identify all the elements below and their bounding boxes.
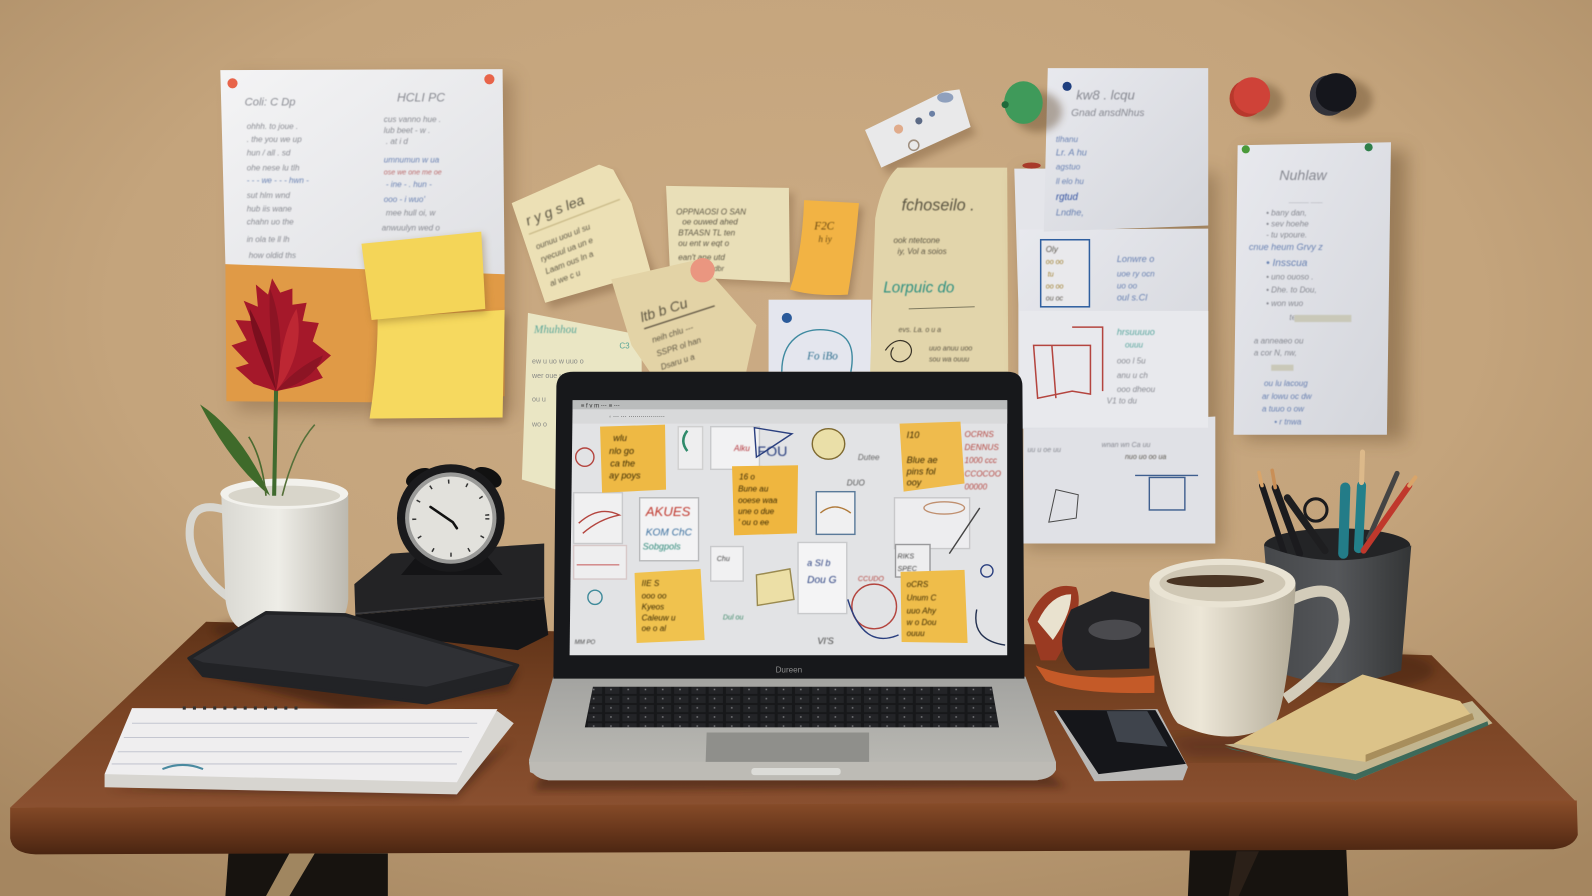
panel: right list sheet: ou lu lacoug [1264, 379, 1308, 388]
note: typed cream note: oe ouwed ahed [682, 218, 738, 227]
cream coffee mug [1149, 559, 1344, 757]
screen sticky notes: ooo oo [642, 591, 667, 600]
panel: right list sheet: • Insscua [1266, 258, 1308, 269]
panel: right list sheet: • uno ouoso . [1266, 272, 1314, 281]
sticky note: lower yellow [370, 310, 508, 424]
screen sticky notes: IIE S [642, 579, 660, 588]
laptop lid [553, 372, 1024, 679]
note: tilted cream note: ryecuul ua un e [539, 235, 595, 264]
middle sheet with blue and red diagrams: Oly [1046, 245, 1059, 254]
note: typed cream note: ean't ane utd [678, 253, 725, 262]
poster handwritten text: how oldid ths [249, 251, 296, 260]
note: torn beige note with pink pin [611, 258, 756, 373]
poster handwritten text: anwuulyn wed o [382, 224, 440, 233]
screen sticky notes: ca the [610, 458, 635, 468]
screen sticky notes: Blue ae [907, 455, 938, 465]
note: pale green-tinted note: ew u uo w uuo o [532, 358, 584, 366]
middle sheet with blue and red diagrams: V1 to du [1107, 396, 1137, 405]
poster handwritten text: hun / all . sd [247, 148, 291, 157]
black box under clock [354, 543, 548, 650]
poster handwritten text [245, 91, 445, 260]
screen labels: MM PO [575, 639, 596, 646]
white mug with flower [190, 278, 355, 642]
poster handwritten text: cus vanno hue . [384, 115, 441, 124]
middle sheet with blue and red diagrams: Lonwre o [1117, 254, 1154, 264]
mug body [221, 496, 348, 632]
screen sticky notes: pins fol [906, 466, 937, 476]
top blue handwriting sheet: Lndhe, [1056, 207, 1084, 217]
note: tall beige note: fchoseilo . [902, 196, 975, 214]
screen labels: DENNUS [965, 443, 999, 452]
screen sticky notes [600, 422, 968, 643]
middle sheet with blue and red diagrams: oul s.Cl [1117, 293, 1148, 303]
poster handwritten text: - - - we - - - hwn - [247, 176, 309, 185]
middle sheet with blue and red diagrams: oo oo [1046, 283, 1064, 291]
panel: layered white sheets [1014, 68, 1222, 549]
note: torn beige note with pink pin: SSPR ol han [655, 335, 703, 358]
screen labels: DUO [847, 479, 865, 488]
note: pale green-tinted note: ou u [532, 395, 546, 403]
mug body [1149, 584, 1296, 737]
laptop screen: ◦ ⋯ ⋯ ⋯⋯⋯⋯⋯⋯ [609, 414, 665, 421]
panel: right list sheet: • Dhe. to Dou, [1266, 286, 1317, 295]
screen sticky notes: ooy [907, 478, 923, 488]
note: torn scrap [865, 89, 977, 175]
note: torn beige note with pink pin: Dsaru u a [660, 352, 696, 372]
screen sticky notes: oe o al [642, 624, 666, 633]
note: tilted cream note: al we c u [549, 268, 582, 289]
lower sketch sheet: wnan wn Ca uu [1102, 441, 1151, 449]
screen sticky notes: ouuu [907, 629, 925, 638]
laptop base [529, 677, 1066, 790]
top blue handwriting sheet: kw8 . lcqu [1076, 88, 1136, 103]
top blue handwriting sheet [1044, 68, 1208, 232]
panel: right list sheet [1234, 142, 1407, 441]
poster white upper sheet [220, 69, 505, 274]
poster handwritten text: chahn uo the [247, 218, 294, 227]
screen sticky notes: ooese waa [738, 496, 778, 505]
panel: left poster [220, 69, 513, 417]
screen labels: 00000 [965, 483, 988, 492]
note: tall beige note: sou wa ouuu [929, 356, 969, 364]
laptop screen: ≡ f v m ⋯ ≡ ⋯ [581, 402, 620, 409]
lower sketch sheet: uu u oe uu [1027, 446, 1061, 454]
screen sticky notes: nlo go [609, 446, 634, 456]
note: tall beige note: Lorpuic do [883, 280, 954, 297]
middle sheet with blue and red diagrams: ooo l 5u [1117, 357, 1146, 366]
brand text: Dureen [776, 666, 802, 675]
notebook with beige cover [1224, 675, 1492, 780]
middle sheet with blue and red diagrams: tu [1048, 270, 1054, 278]
poster handwritten text: ose we one me oe [384, 169, 442, 177]
screen labels: KOM ChC [646, 527, 693, 538]
note: tall beige note: iy, Vol a soios [898, 247, 947, 256]
magnet: green [1002, 81, 1062, 132]
panel: right list sheet: teecu [1289, 313, 1310, 322]
screen sticky notes: uuo Ahy [907, 607, 937, 616]
lower sketch sheet [1023, 417, 1215, 543]
magnet: red [1230, 77, 1283, 120]
note: typed cream note: pttl hon ptr dbr [677, 265, 725, 273]
gadgets behind phone [1027, 586, 1154, 693]
screen sketches [574, 427, 1005, 645]
poster handwritten text: HCLI PC [397, 91, 445, 105]
note: pale green-tinted note: C3 [619, 341, 630, 350]
note: pale green-tinted note: Mhuhhou [533, 324, 577, 336]
desk front edge [10, 801, 1578, 854]
screen labels: RIKS [898, 553, 914, 561]
phone [1054, 709, 1188, 781]
panel: right list sheet: a tuuo o ow [1262, 404, 1305, 413]
poster handwritten text: lub beet - w . [384, 126, 430, 135]
poster handwritten text: Coli: C Dp [245, 97, 296, 109]
small red clip [1022, 163, 1041, 169]
pencils [1259, 452, 1415, 554]
screen labels: CCOCOO [965, 469, 1002, 478]
poster handwritten text: ohe nese lu tlh [247, 164, 300, 173]
top blue handwriting sheet: Lr. A hu [1056, 147, 1087, 157]
note: pale green-tinted note: wo o [531, 421, 547, 429]
red flower [231, 278, 331, 391]
note: tilted cream note [512, 165, 658, 309]
desk legs [225, 849, 1348, 896]
panel: right list sheet: cnue heum Grvy z [1249, 242, 1323, 252]
screen labels: Alku [733, 444, 750, 453]
screen labels: VI'S [817, 636, 834, 646]
panel: right list sheet: a anneaeo ou [1254, 336, 1304, 345]
note: typed cream note: OPPNAOSI O SAN [676, 207, 746, 216]
screen labels: FOU [757, 444, 787, 460]
top blue handwriting sheet: tlhanu [1056, 135, 1078, 144]
cup interior [1264, 528, 1410, 563]
screen sticky notes: Kyeos [642, 603, 664, 612]
top blue handwriting sheet: agstuo [1056, 163, 1081, 172]
poster handwritten text: - ine - . hun - [386, 180, 432, 189]
panel: right list sheet: _____ ___ [1288, 196, 1323, 204]
poster handwritten text: umnumun w ua [384, 156, 440, 165]
laptop [529, 372, 1066, 790]
note: white sketch sheet with blue dot [769, 300, 871, 372]
note: tilted cream note: r y g s lea [524, 193, 587, 230]
screen sticky notes: ay poys [609, 470, 641, 480]
middle sheet with blue and red diagrams: oo oo [1046, 258, 1064, 266]
panel: right list sheet: - tu vpoure. [1266, 231, 1307, 240]
laptop screen [570, 400, 1007, 655]
poster handwritten text: sut hlm wnd [247, 191, 290, 200]
screen labels: CCUDO [858, 575, 884, 583]
poster handwritten text: ohhh. to joue . [247, 122, 298, 131]
panel: right list sheet: ar lowu oc dw [1262, 392, 1313, 401]
cup body [1264, 546, 1411, 683]
screen sticky notes: ' ou o ee [738, 518, 769, 527]
panel: right list sheet: Nuhlaw [1279, 168, 1328, 184]
screen labels: 1000 ccc [965, 456, 997, 465]
middle sheet with blue and red diagrams: ouuu [1125, 340, 1143, 349]
screen labels: SPEC [898, 565, 918, 573]
poster pins [227, 74, 494, 88]
mug handle [190, 507, 231, 599]
screen sticky notes: une o due [738, 507, 775, 516]
note: typed cream note [666, 186, 794, 286]
screen sticky notes: I10 [907, 430, 919, 440]
poster handwritten text: in ola te ll lh [247, 235, 290, 244]
black notebook [189, 613, 518, 711]
middle sheet with blue and red diagrams: uoe ry ocn [1117, 269, 1155, 278]
poster handwritten text: . the you we up [247, 135, 302, 144]
note: tilted cream note: Laam ous ln a [544, 249, 595, 276]
sticky note: orange note: F2C [813, 221, 835, 233]
desk top [10, 622, 1578, 854]
back sheet [1014, 169, 1052, 429]
sticky note: upper yellow [361, 232, 487, 323]
note: tilted cream note: ounuu uou ul su [535, 222, 592, 252]
panel: right list sheet: a cor N, nw, [1254, 349, 1297, 358]
stem and leaves [200, 386, 315, 496]
alarm clock [397, 463, 505, 575]
panel: right list sheet: • won wuo [1266, 299, 1304, 308]
screen labels: AKUES [645, 504, 691, 519]
screen labels: Dul ou [723, 614, 743, 622]
note: torn beige note with pink pin: ltb b Cu [638, 295, 690, 326]
panel: right list sheet: • bany dan, [1266, 208, 1307, 217]
magnet: black [1310, 73, 1373, 120]
top blue handwriting sheet: rgtud [1056, 192, 1078, 203]
note: tall beige note: evs. La. o u a [899, 326, 941, 334]
poster handwritten text: mee hull oi, w [386, 208, 437, 217]
screen labels: Sobgpols [643, 542, 681, 552]
screen sticky notes: oCRS [907, 580, 929, 589]
screen sticky notes: Unum C [907, 593, 937, 602]
note: pale green-tinted note [522, 313, 642, 490]
mug handle [1285, 591, 1344, 699]
poster orange lower half [225, 262, 505, 402]
screen sticky notes: w o Dou [907, 618, 937, 627]
screen labels: Dou G [807, 575, 837, 586]
note: tall beige note: ook ntetcone [893, 236, 940, 245]
trackpad [706, 732, 869, 762]
lower sketch sheet: nuo uo oo ua [1125, 453, 1166, 461]
screen labels: OCRNS [965, 430, 994, 439]
white spiral notepad [105, 708, 514, 797]
sticky note: orange note [790, 200, 863, 300]
note: pale green-tinted note: wer oue ue wo [531, 372, 578, 380]
panel: right list sheet: • sev hoehe [1266, 220, 1309, 229]
screen sticky notes: wlu [613, 433, 627, 443]
note: white sketch sheet with blue dot: Fo iBo [806, 351, 838, 363]
middle sheet with blue and red diagrams: ou oc [1046, 295, 1064, 303]
sticky note: orange note: h iy [818, 234, 833, 244]
note: typed cream note: ou ent w eqt o [678, 239, 730, 248]
middle sheet with blue and red diagrams: uo oo [1117, 282, 1138, 291]
screen sticky notes: 16 o [739, 472, 755, 481]
top blue handwriting sheet: Gnad ansdNhus [1071, 108, 1144, 119]
middle sheet with blue and red diagrams: ooo dheou [1117, 385, 1156, 394]
poster handwritten text: hub iis wane [247, 204, 292, 213]
poster handwritten text: . at i d [386, 137, 408, 146]
screen labels: Chu [717, 555, 730, 563]
screen labels: Dutee [858, 453, 880, 462]
middle sheet with blue and red diagrams: anu u ch [1117, 371, 1148, 380]
middle sheet with blue and red diagrams [1018, 229, 1208, 429]
panel: right list sheet: • r tnwa [1274, 418, 1302, 427]
note: tall beige note: uuo anuu uoo [929, 344, 972, 352]
top blue handwriting sheet: ll elo hu [1056, 177, 1084, 186]
pencil cup [1259, 452, 1434, 689]
note: tall beige note [870, 168, 1008, 372]
screen sticky notes: Caleuw u [642, 614, 676, 623]
note: torn beige note with pink pin: neih chlu --- [651, 323, 695, 345]
note: typed cream note: BTAASN TL ten [678, 229, 736, 238]
poster handwritten text: ooo - i wuo' [384, 195, 425, 204]
middle sheet with blue and red diagrams: hrsuuuuo [1117, 327, 1155, 337]
keyboard [585, 687, 999, 727]
screen labels [575, 430, 1002, 646]
screen labels: a Sl b [807, 558, 831, 568]
screen sticky notes: Bune au [738, 485, 769, 494]
